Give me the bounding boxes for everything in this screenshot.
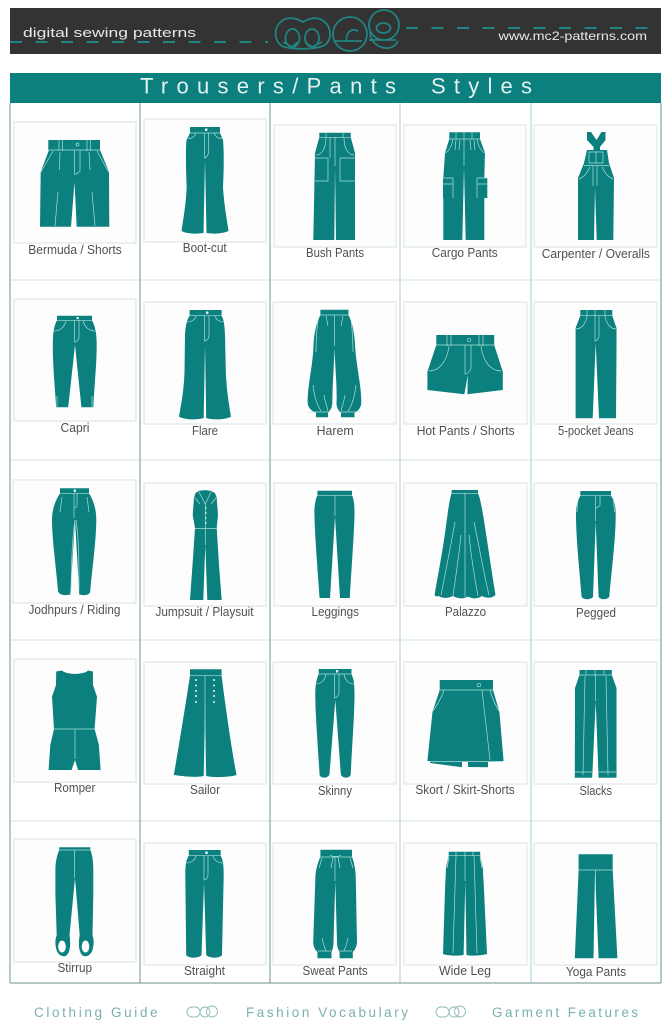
panel: Hot Pants / Shorts	[404, 302, 527, 438]
icon: jodhpurs	[52, 488, 96, 595]
footer logo right	[436, 1006, 466, 1017]
panel: Jumpsuit / Playsuit	[144, 483, 266, 619]
label: Bermuda / Shorts	[28, 243, 122, 257]
label: Boot-cut	[183, 241, 227, 255]
label: Flare	[192, 424, 218, 438]
footer: Clothing Guide: Clothing Guide	[34, 1005, 158, 1020]
label: Skinny	[318, 784, 353, 798]
label: Romper	[54, 781, 95, 795]
panel: Harem	[273, 302, 396, 438]
icon: capri pants	[53, 316, 97, 407]
icon: cargo pants	[443, 132, 487, 240]
icon: yoga pants	[575, 854, 617, 958]
icon: slacks	[575, 670, 616, 778]
icon: Bermuda shorts	[40, 140, 109, 227]
stirrup openings	[58, 940, 89, 952]
label: Cargo Pants	[432, 246, 498, 260]
title: Styles	[431, 74, 532, 98]
panel: Slacks	[534, 662, 657, 798]
icon: flare pants	[179, 310, 231, 419]
label: Jodhpurs / Riding	[28, 603, 121, 617]
panel: Yoga Pants	[534, 843, 657, 979]
footer: Fashion Vocabulary: Fashion Vocabulary	[246, 1005, 408, 1020]
panel: Stirrup	[14, 839, 136, 975]
label: Pegged	[576, 606, 616, 620]
panel: Capri	[14, 299, 136, 435]
panel: Romper	[14, 659, 136, 795]
icon: harem pants	[308, 310, 361, 417]
title: Trousers/Pants	[140, 74, 396, 98]
icon: boot-cut pants	[182, 127, 228, 234]
panel: Leggings	[274, 483, 396, 619]
label: Sailor	[190, 783, 220, 797]
panel: Pegged	[534, 483, 657, 620]
icon: sweat pants	[313, 850, 357, 958]
label: Harem	[317, 424, 354, 438]
icon: hot pants	[427, 335, 503, 394]
panel: Cargo Pants	[404, 125, 526, 260]
icon: stirrup pants	[55, 847, 94, 956]
footer	[34, 1005, 638, 1020]
panel: Boot-cut	[144, 119, 266, 255]
label: Leggings	[312, 605, 359, 619]
panel: Wide Leg	[404, 843, 527, 978]
panel: Sailor	[144, 662, 266, 797]
panel: Straight	[144, 843, 266, 978]
icon: skinny pants	[315, 669, 354, 778]
label: Hot Pants / Shorts	[417, 424, 515, 438]
panel: Jodhpurs / Riding	[13, 480, 136, 617]
icon: sailor pants	[174, 669, 236, 777]
panel: Flare	[144, 302, 266, 438]
header tagline: digital sewing patterns	[23, 25, 197, 40]
header website: www.mc2-patterns.com	[497, 29, 647, 43]
label: Slacks	[580, 784, 612, 798]
icon: skort	[427, 680, 504, 767]
header banner	[10, 8, 661, 54]
icon: straight pants	[185, 850, 224, 958]
panel: Palazzo	[404, 483, 527, 619]
label: Sweat Pants	[302, 964, 368, 978]
icon: palazzo pants	[435, 490, 496, 598]
panel: 5-pocket Jeans	[534, 302, 657, 438]
icon: overalls	[578, 132, 614, 240]
left dashed stitching	[10, 41, 268, 43]
footer: Garment Features: Garment Features	[492, 1005, 638, 1020]
icon: wide leg pants	[443, 852, 487, 956]
icon: bush pants	[313, 133, 355, 240]
title band	[10, 73, 661, 103]
title	[140, 74, 532, 98]
label: 5-pocket Jeans	[558, 424, 634, 438]
label: Capri	[60, 421, 90, 435]
label: Jumpsuit / Playsuit	[156, 605, 254, 619]
panel: Skinny	[273, 662, 396, 798]
panel: Sweat Pants	[273, 843, 396, 978]
label: Palazzo	[445, 605, 486, 619]
label: Skort / Skirt-Shorts	[415, 783, 515, 797]
logo	[276, 10, 399, 51]
label: Carpenter / Overalls	[542, 247, 650, 261]
panel: Skort / Skirt-Shorts	[404, 662, 527, 797]
icon: romper	[49, 670, 101, 770]
panel: Bush Pants	[274, 125, 396, 260]
panel: Carpenter / Overalls	[534, 125, 657, 261]
icon: 5-pocket jeans	[576, 310, 616, 418]
icon: jumpsuit	[190, 490, 222, 600]
panel: Bermuda	[14, 122, 136, 257]
label: Straight	[184, 964, 225, 978]
icon: pegged pants	[576, 491, 616, 599]
label: Yoga Pants	[566, 965, 626, 979]
label: Bush Pants	[306, 246, 364, 260]
label: Wide Leg	[439, 964, 491, 978]
icon: leggings	[314, 491, 354, 598]
right dashed stitching	[406, 27, 661, 29]
footer logo left	[187, 1006, 218, 1017]
label: Stirrup	[58, 961, 92, 975]
